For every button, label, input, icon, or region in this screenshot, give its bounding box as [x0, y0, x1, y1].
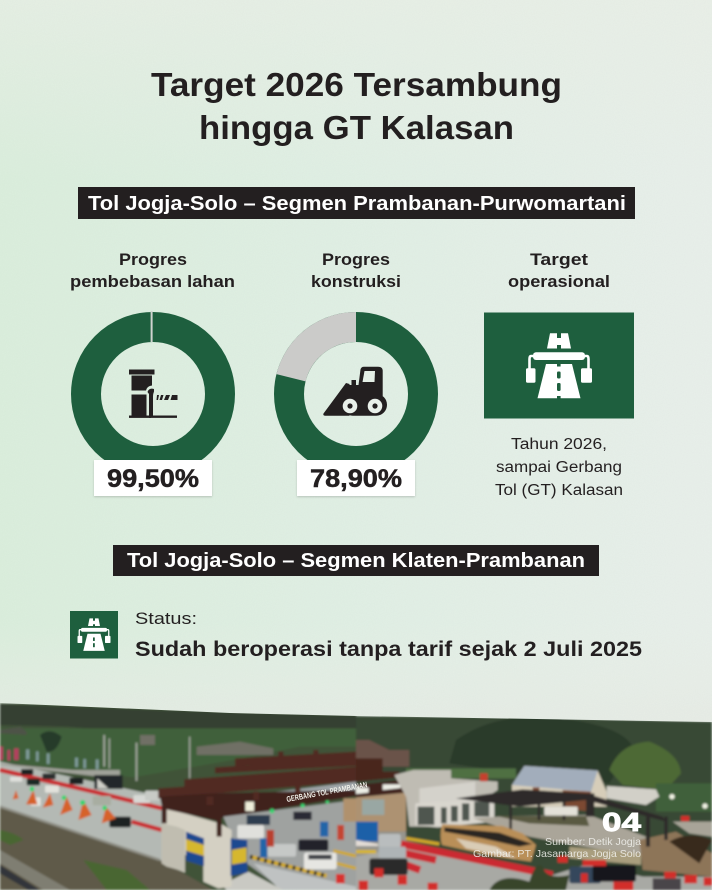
red blocks [359, 816, 712, 890]
gate sign text: GERBANG TOL PRAMBANAN [286, 780, 368, 804]
plaza [473, 815, 646, 857]
heading: progres konstruksi: konstruksi [311, 273, 401, 291]
status text [135, 609, 642, 661]
heading: progres konstruksi [311, 251, 401, 291]
heading: progres pembebasan lahan: Progres [119, 251, 187, 269]
gate remainder [356, 758, 399, 782]
source credit: Sumber: Detik Jogja [545, 836, 641, 848]
title [151, 66, 562, 146]
icon: bulldozer [323, 367, 387, 416]
text: target tahun 2026: Tol (GT) Kalasan [495, 482, 623, 499]
section banner: Prambanan-Purwomartani [78, 187, 635, 219]
gate pillar [162, 808, 232, 888]
icon: toll road [526, 333, 592, 399]
photo right part [356, 713, 712, 890]
section banner: Prambanan-Purwomartani: Tol Jogja-Solo – Segmen Prambanan-Purwomartani [88, 193, 626, 215]
plaza [223, 800, 356, 890]
steel canopy [456, 789, 666, 822]
heading: target operasional [508, 251, 610, 291]
heading: progres pembebasan lahan [70, 251, 235, 291]
cars [379, 834, 401, 848]
label: 99,50% [94, 460, 212, 496]
label: 78,90%: 78,90% [310, 465, 402, 493]
source credit [474, 838, 642, 859]
section banner: Klaten-Prambanan [113, 545, 599, 576]
status text: Status: [135, 609, 197, 628]
barriers [401, 844, 553, 875]
icon: toll booth [129, 370, 178, 418]
gate roof [158, 752, 356, 798]
text: target tahun 2026: sampai Gerbang [496, 459, 622, 476]
photo: Gerbang Tol Prambanan [0, 703, 712, 890]
title: Target 2026 Tersambung [151, 66, 562, 103]
photo left part [0, 703, 356, 890]
title: hingga GT Kalasan [199, 109, 514, 146]
text: target tahun 2026 [495, 436, 623, 499]
status text: Sudah beroperasi tanpa tarif sejak 2 Juli 2025 [135, 638, 642, 661]
text: target tahun 2026: Tahun 2026, [511, 436, 607, 453]
section banner: Klaten-Prambanan: Tol Jogja-Solo – Segmen Klaten-Prambanan [127, 550, 585, 572]
donut chart: 78,90% [289, 327, 423, 461]
page number: 04 [602, 807, 642, 837]
buildings [394, 770, 498, 827]
heading: progres konstruksi: Progres [322, 251, 390, 269]
panel: target operasional [484, 312, 634, 418]
heading: target operasional: operasional [508, 273, 610, 291]
heading: progres pembebasan lahan: pembebasan lahan [70, 273, 235, 291]
bus [441, 824, 536, 862]
donut chart: 99,50% [86, 311, 220, 461]
source credit: Gambar: PT. Jasamarga Jogja Solo [473, 848, 641, 860]
label: 99,50%: 99,50% [107, 465, 199, 493]
heading: target operasional: Target [530, 251, 589, 269]
icon: toll road small [70, 611, 118, 658]
label: 78,90% [297, 460, 415, 496]
